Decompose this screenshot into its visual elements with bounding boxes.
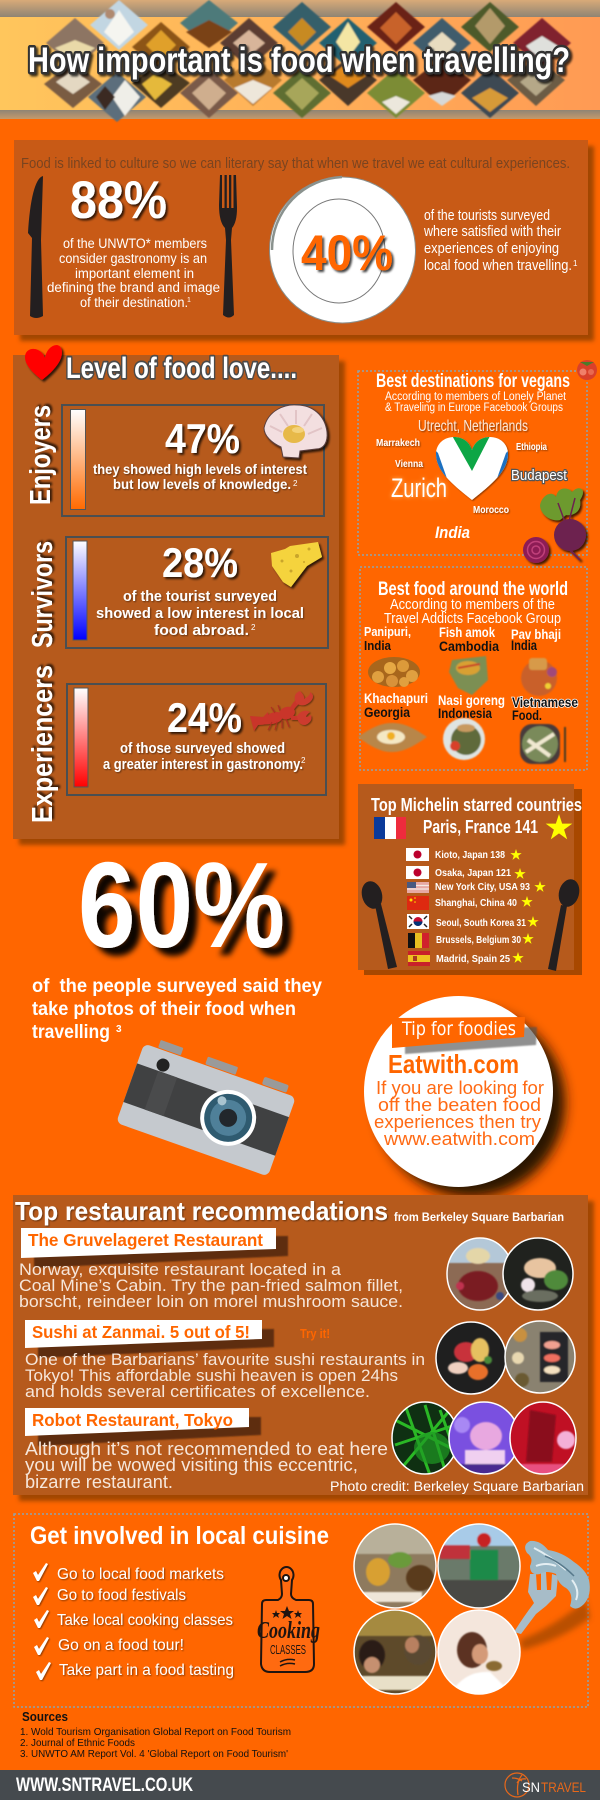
restaurant: Zanmai: One of the Barbarians’ favourite sushi restaurants in (25, 1350, 425, 1369)
photo: purple robot show (449, 1402, 520, 1476)
card: enjoyers 47%: 47% (165, 415, 240, 462)
restaurant: Robot: you will be wowed visiting this eccentric, (25, 1455, 358, 1475)
card: enjoyers 47%: but low levels of knowledge. (113, 476, 291, 492)
label: Survivors: Survivors (27, 541, 59, 648)
header banner (0, 0, 600, 122)
heading: get involved: Get involved in local cuisine (30, 1522, 329, 1550)
subheading: vegans source: According to members of Lonely Planet (385, 391, 567, 403)
icon: camera (116, 1035, 299, 1176)
row: Kioto (406, 848, 522, 861)
cities word cloud: Vienna (395, 459, 423, 470)
checklist: Go to local food markets (57, 1566, 224, 1583)
heading: top restaurant recommedations: Top restaurant recommedations (15, 1196, 388, 1226)
row: New York (407, 881, 546, 893)
card: survivors 28%: of the tourist surveyed (123, 588, 277, 605)
footer url: WWW.SNTRAVEL.CO.UK (16, 1775, 193, 1796)
top city: Paris: Paris, France 141 (423, 817, 538, 837)
restaurant: Gruvelageret: borscht, reindeer loin on morel mushroom sauce. (19, 1292, 403, 1311)
dish: pav bhaji: Pav bhaji (511, 627, 561, 642)
logo: SN Travel (505, 1773, 586, 1797)
cities word cloud: Zurich (391, 473, 447, 503)
card: experiencers 24% (67, 684, 326, 795)
dish: vietnamese food: Food. (512, 708, 542, 723)
photo: plated dish (354, 1524, 436, 1608)
icon: cooking classes board (257, 1567, 320, 1672)
dish: fish amok: Cambodia (439, 639, 499, 654)
flag: France (374, 817, 406, 839)
panel: level of food love (13, 345, 339, 839)
icon: splashing fork (514, 1541, 590, 1650)
text: 60% description: travelling (32, 1021, 110, 1043)
dish: pav bhaji (511, 627, 561, 696)
sources: 2. Journal of Ethnic Foods (20, 1737, 135, 1749)
text: 40% description: where satisfied with their (423, 224, 561, 240)
dish: panipuri: India (364, 638, 392, 653)
stat: 40%: 40% (301, 225, 393, 281)
dish: fish amok (439, 625, 499, 695)
text: 40% description (423, 208, 578, 274)
text: tip description: experiences then try (374, 1112, 541, 1132)
row: Brussels (408, 933, 534, 948)
panel: top michelin starred countries (358, 784, 582, 975)
panel: best food around the world (358, 567, 587, 770)
dish: nasi goreng: Nasi goreng (438, 693, 505, 708)
cities word cloud: India (435, 523, 470, 542)
cities word cloud: Ethiopia (516, 442, 547, 453)
photo: food market (438, 1524, 520, 1608)
restaurant: Zanmai: and holds several certificates of excellence. (25, 1382, 370, 1401)
dish: fish amok: Fish amok (439, 625, 495, 640)
row: Madrid (408, 951, 524, 966)
dish: khachapuri: Georgia (364, 705, 410, 720)
row: Shanghai (407, 896, 533, 910)
panel: best destinations for vegans (358, 360, 597, 563)
row: Seoul (407, 914, 539, 929)
restaurant: Robot (25, 1402, 576, 1492)
sources: 1. Wold Tourism Organisation Global Report on Food Tourism (20, 1726, 291, 1738)
panel: tip for foodies (364, 996, 565, 1197)
dish: panipuri (364, 624, 420, 687)
text: 88% description: consider gastronomy is an (59, 251, 207, 266)
text: 60% description (32, 975, 322, 1043)
note: try it: Try it! (300, 1326, 330, 1341)
dish: vietnamese food (512, 695, 578, 764)
icon: vegan heart (436, 437, 510, 502)
row: Osaka (406, 866, 526, 879)
cities word cloud: Morocco (473, 505, 509, 516)
sources: 3. UNWTO AM Report Vol. 4 'Global Report on Food Tourism' (20, 1748, 288, 1760)
row: Brussels: Brussels, Belgium 30 (436, 935, 521, 946)
checklist: Go to food festivals (57, 1587, 186, 1604)
icon: right spoon (548, 877, 582, 971)
restaurant: Zanmai: Sushi at Zanmai. 5 out of 5! (32, 1322, 250, 1342)
dish: nasi goreng (438, 693, 505, 760)
subheading: from Berkeley Square Barbarian: from Berkeley Square Barbarian (394, 1210, 564, 1224)
text: 40% description: 1 (573, 259, 578, 268)
restaurant: Robot: Robot Restaurant, Tokyo (32, 1410, 233, 1430)
logo: SN Travel: TRAVEL (541, 1779, 586, 1795)
row: Osaka: Osaka, Japan 121 (435, 868, 511, 879)
row: Madrid: Madrid, Spain 25 (436, 954, 510, 965)
photo credit: Photo credit: Berkeley Square Barbarian (330, 1479, 584, 1494)
icon: large star (546, 814, 572, 839)
card: survivors 28%: showed a low interest in local (96, 605, 304, 622)
checklist: Take local cooking classes (57, 1612, 233, 1629)
checklist (33, 1563, 234, 1680)
restaurant: Gruvelageret: Coal Mine’s Cabin. Try the pan-fried salmon fillet, (19, 1276, 403, 1295)
text: 88% description: of the UNWTO* members (63, 236, 207, 251)
photo: salmon dish (503, 1238, 573, 1310)
card: enjoyers 47%: they showed high levels of interest (93, 461, 307, 477)
subheading: best food source: According to members of the (390, 597, 555, 613)
icon: plate with 40% (270, 177, 416, 323)
icon: fork (219, 175, 237, 318)
icon: beetroot (523, 488, 586, 563)
restaurant: Robot: Although it’s not recommended to eat here (25, 1439, 388, 1459)
dish: pav bhaji: India (511, 638, 537, 653)
icon: knife (28, 176, 43, 318)
icon: heart (25, 345, 62, 380)
text: 40% description: local food when travelling. (424, 258, 572, 274)
sources (20, 1709, 291, 1760)
panel: get involved in local cuisine (14, 1514, 590, 1707)
row: Seoul: Seoul, South Korea 31 (436, 918, 526, 929)
restaurant: Zanmai: Tokyo! This affordable sushi heaven is open 24hs (25, 1366, 398, 1385)
food photo diamonds (44, 0, 571, 122)
stat: 88%: 88% (70, 171, 167, 230)
card: enjoyers 47%: 2 (293, 479, 298, 488)
checklist: Take part in a food tasting (59, 1662, 234, 1679)
photo: red meat dish (447, 1238, 513, 1310)
banner: tip for foodies (392, 1017, 537, 1054)
row: New York: New York City, USA 93 (435, 882, 530, 893)
card: survivors 28% (66, 537, 328, 648)
text: 40% description: of the tourists surveyed (424, 208, 550, 224)
text: 60% description: 3 (116, 1024, 122, 1035)
subheading: vegans source (385, 391, 567, 414)
logo: SN Travel: SN (522, 1779, 540, 1795)
card: survivors 28%: 28% (162, 539, 238, 586)
text: tip description: off the beaten food (378, 1095, 541, 1115)
card: experiencers 24%: 24% (167, 694, 242, 741)
dish: nasi goreng: Indonesia (438, 706, 492, 721)
cities word cloud: Budapest (511, 467, 568, 484)
row: Shanghai: Shanghai, China 40 (435, 898, 517, 909)
text: 40% description: experiences of enjoying (424, 241, 559, 257)
restaurant: Gruvelageret: The Gruvelageret Restaurant (28, 1230, 263, 1250)
icon: left spoon (359, 879, 397, 969)
text: tip description (374, 1078, 544, 1149)
panel: top restaurant recommendations (13, 1195, 588, 1495)
footer bar (0, 1770, 600, 1800)
card: enjoyers 47% (62, 405, 327, 516)
heading: level of food love: Level of food love.... (66, 352, 297, 385)
icon: cooking classes board: Cooking (257, 1618, 320, 1644)
checklist: Go on a food tour! (58, 1637, 184, 1654)
card: experiencers 24%: of those surveyed showed (120, 741, 285, 757)
card: experiencers 24%: a greater interest in gastronomy. (103, 757, 303, 773)
restaurant: Robot: bizarre restaurant. (25, 1472, 173, 1492)
subheading: best food source (384, 597, 561, 627)
restaurant: Gruvelageret (19, 1228, 573, 1311)
dish: khachapuri: Khachapuri (364, 691, 428, 706)
photo: woman tasting food (438, 1610, 520, 1694)
card: experiencers 24%: 2 (301, 756, 306, 765)
card: survivors 28%: 2 (251, 623, 256, 632)
text: 88% description: of their destination. (80, 295, 188, 310)
heading: eatwith.com: Eatwith.com (388, 1049, 519, 1079)
icon: cooking classes board: CLASSES (270, 1642, 306, 1657)
icon: tomato (577, 360, 597, 380)
photo: couple dining (354, 1610, 436, 1694)
cities word cloud: Marrakech (376, 438, 420, 449)
photo: sushi platter (505, 1321, 575, 1393)
sources: Sources (22, 1709, 68, 1724)
icon: cheese (271, 542, 322, 587)
photo: sushi bowl (436, 1322, 506, 1394)
label: Experiencers: Experiencers (27, 665, 59, 823)
text: 60% description: take photos of their food when (32, 998, 296, 1020)
row: Kioto: Kioto, Japan 138 (435, 850, 505, 861)
cities word cloud: Utrecht, Netherlands (418, 418, 528, 435)
text: 88% description: important element in (75, 266, 194, 281)
stat: 60%: 60% (78, 837, 285, 973)
dish: khachapuri (358, 691, 428, 752)
subheading: best food source: Travel Addicts Facebook Group (384, 611, 561, 627)
banner: tip for foodies: Tip for foodies (401, 1018, 516, 1040)
text: 88% description: 1 (187, 297, 191, 304)
label: Enjoyers: Enjoyers (25, 405, 57, 505)
photo: green lasers (392, 1402, 458, 1475)
text: tip description: www.eatwith.com (383, 1129, 535, 1149)
cities word cloud (376, 418, 568, 542)
restaurant: Gruvelageret: Norway, exquisite restaurant located in a (19, 1260, 342, 1279)
photo: red robot (510, 1402, 576, 1476)
card: survivors 28%: food abroad. (154, 622, 249, 639)
text: 60% description: of the people surveyed said they (32, 975, 322, 997)
text: 88% description (47, 236, 220, 310)
dish: vietnamese food: Vietnamese (512, 695, 578, 710)
dish: panipuri: Panipuri, (364, 624, 411, 639)
icon: lobster (250, 691, 313, 731)
text: tip description: If you are looking for (376, 1078, 544, 1098)
restaurant: Zanmai (25, 1320, 575, 1401)
icon: scallop shell (264, 405, 327, 458)
panel: food is culture (14, 140, 588, 335)
text: 88% description: defining the brand and image (47, 280, 220, 295)
subheading: vegans source: & Traveling in Europe Facebook Groups (385, 402, 563, 414)
